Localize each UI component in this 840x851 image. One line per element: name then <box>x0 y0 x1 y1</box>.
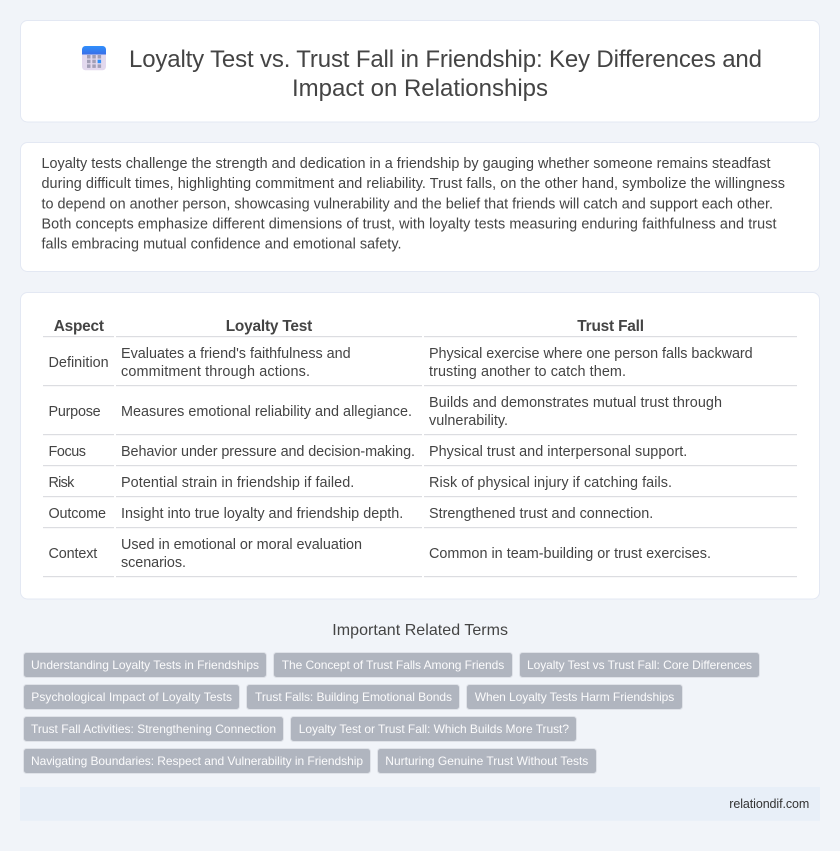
intro text block: Both concepts emphasize different dimensions of trust, with loyalty tests measuring enduring faithfulness and trust <box>42 216 776 232</box>
footer bar <box>20 787 820 821</box>
related term chips: Trust Falls: Building Emotional Bonds <box>255 690 452 704</box>
related term chips: Navigating Boundaries: Respect and Vulnerability in Friendship <box>31 754 363 768</box>
table row: outcome: Strengthened trust and connection. <box>429 506 653 522</box>
table row: outcome: Insight into true loyalty and friendship depth. <box>121 506 403 522</box>
related term chips: Trust Fall Activities: Strengthening Connection <box>31 722 276 736</box>
related term chips: Loyalty Test vs Trust Fall: Core Differences <box>527 658 752 672</box>
table row: risk <box>43 475 797 497</box>
related term chips: Psychological Impact of Loyalty Tests <box>31 690 232 704</box>
table row: definition: Physical exercise where one person falls backward <box>429 346 753 362</box>
table row: context: scenarios. <box>121 555 186 571</box>
table row: purpose: Builds and demonstrates mutual trust through <box>429 395 722 411</box>
table row: outcome <box>43 506 797 528</box>
table row: outcome: Outcome <box>48 506 106 522</box>
table row: definition: commitment through actions. <box>121 364 310 380</box>
table row: risk: Potential strain in friendship if failed. <box>121 475 354 491</box>
intro text block: Loyalty tests challenge the strength and dedication in a friendship by gauging whether someone remains steadfast <box>42 156 770 172</box>
related term chips: The Concept of Trust Falls Among Friends <box>282 658 504 672</box>
intro text block: during difficult times, highlighting commitment and reliability. Trust falls, on the other hand, symbolize the willingness <box>42 176 785 192</box>
table row: definition: Evaluates a friend's faithfulness and <box>121 346 351 362</box>
related term chips: Loyalty Test or Trust Fall: Which Builds More Trust? <box>299 722 569 736</box>
table row: focus: Focus <box>48 444 86 460</box>
table row: focus <box>43 444 797 466</box>
table row: context: Used in emotional or moral evaluation <box>121 537 362 553</box>
title: Loyalty Test vs. Trust Fall in Friendship: Key Differences and <box>129 46 762 73</box>
table row: risk: Risk of physical injury if catching fails. <box>429 475 672 491</box>
heading: important related terms: Important Related Terms <box>332 622 508 639</box>
intro text block: to depend on another person, showcasing vulnerability and the belief that friends will catch and support each other. <box>42 196 773 212</box>
table row: purpose: vulnerability. <box>429 413 508 429</box>
related term chips <box>24 652 760 774</box>
intro text block <box>42 156 785 252</box>
table header row: Aspect <box>54 318 104 335</box>
table row: definition: trusting another to catch them. <box>429 364 626 380</box>
related term chips: Understanding Loyalty Tests in Friendships <box>31 658 259 672</box>
table row: definition: Definition <box>48 355 109 371</box>
table row: definition <box>43 346 797 386</box>
table header row <box>43 318 797 337</box>
table row: focus: Behavior under pressure and decision-making. <box>121 444 415 460</box>
panel: intro paragraph <box>20 142 820 272</box>
table row: focus: Physical trust and interpersonal support. <box>429 444 687 460</box>
related term chips: When Loyalty Tests Harm Friendships <box>475 690 674 704</box>
table row: purpose: Purpose <box>48 404 101 420</box>
intro text block: falls embracing mutual confidence and emotional safety. <box>42 236 402 252</box>
table row: context <box>43 537 797 577</box>
panel: title header <box>20 20 820 122</box>
title <box>129 46 762 102</box>
table row: context: Context <box>48 546 97 562</box>
table row: risk: Risk <box>48 475 75 491</box>
related term chips: Nurturing Genuine Trust Without Tests <box>385 754 588 768</box>
footer bar: relationdif.com <box>729 797 809 811</box>
title: Impact on Relationships <box>292 75 548 102</box>
table row: context: Common in team-building or trust exercises. <box>429 546 711 562</box>
table row: purpose: Measures emotional reliability and allegiance. <box>121 404 412 420</box>
table header row: Loyalty Test <box>226 318 312 335</box>
table row: purpose <box>43 395 797 435</box>
panel: comparison table <box>20 292 820 599</box>
table header row: Trust Fall <box>577 318 644 335</box>
icon: calendar <box>82 46 106 70</box>
